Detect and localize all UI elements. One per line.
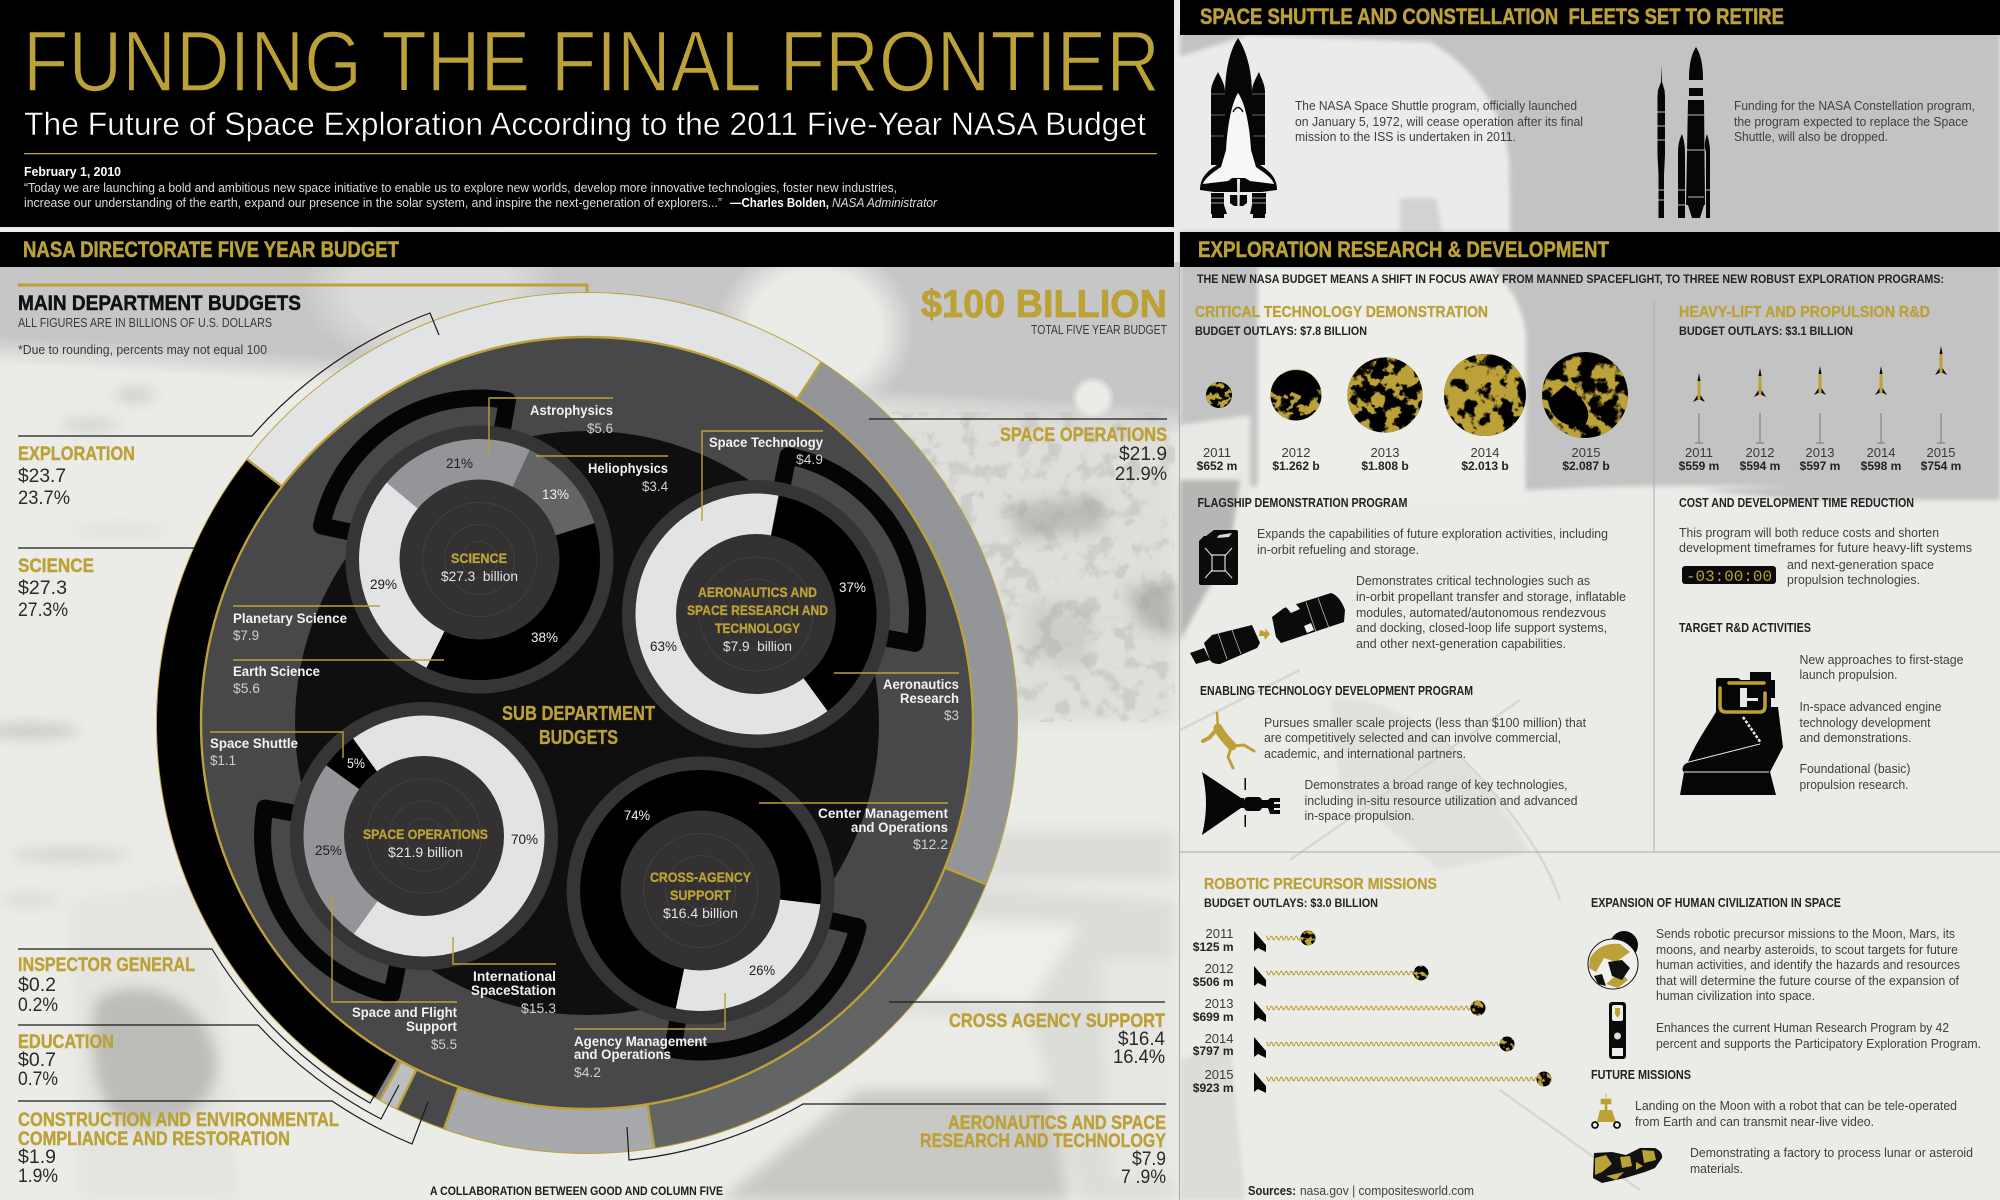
rocket chart by year: 2012 xyxy=(1746,445,1774,460)
sub donut: space operations: $21.9 billion xyxy=(388,845,463,860)
main label: construction: $1.9 xyxy=(18,1147,56,1168)
sub donut: aeronautics: 63% xyxy=(650,638,677,654)
panel: cost and development time: and next-generation space xyxy=(1787,557,1934,572)
main department budgets heading: ALL FIGURES ARE IN BILLIONS OF U.S. DOLLARS xyxy=(18,315,272,330)
quote xyxy=(24,180,938,210)
panel: expansion of human civilization: materials. xyxy=(1690,1161,1743,1176)
signal chart by year: 2013 xyxy=(1205,996,1234,1011)
sub donut: aeronautics: AERONAUTICS AND xyxy=(698,585,817,600)
section bar: shuttle fleets xyxy=(1180,0,2000,35)
panel: heavy-lift and propulsion: BUDGET OUTLAYS: $3.1 BILLION xyxy=(1679,324,1853,338)
sub-department leaders and labels: Planetary Science xyxy=(233,611,347,626)
main label: aeronautics and space research xyxy=(627,1104,1166,1188)
main label: construction: COMPLIANCE AND RESTORATION xyxy=(18,1129,290,1150)
sub donut: space operations: SPACE OPERATIONS xyxy=(363,827,488,842)
main label: space operations: $21.9 xyxy=(1119,444,1167,465)
text: constellation: Funding for the NASA Constellation program, xyxy=(1734,98,1975,113)
panel: flagship demonstration: modules, automated/autonomous rendezvous xyxy=(1356,605,1606,620)
main label: science: $27.3 xyxy=(18,578,67,599)
panel: target activities: launch propulsion. xyxy=(1800,667,1898,682)
sub donut: space operations xyxy=(263,696,564,994)
main label: science: 27.3% xyxy=(18,600,68,621)
sub-department leaders and labels: International xyxy=(473,969,556,984)
panel: expansion of human civilization: moons, and nearby asteroids, to scout targets for future xyxy=(1656,942,1958,957)
sub-department leaders and labels: $5.5 xyxy=(431,1037,457,1052)
sub-department leaders and labels: Earth Science xyxy=(233,664,320,679)
panel: target activities: and demonstrations. xyxy=(1800,730,1912,745)
panel: target activities xyxy=(1679,621,1964,795)
subtitle: The Future of Space Exploration According to the 2011 Five-Year NASA Budget xyxy=(24,106,1146,142)
panel: expansion of human civilization: Landing on the Moon with a robot that can be tele-operated xyxy=(1635,1098,1957,1113)
dark central disc xyxy=(295,431,879,1015)
main label: space operations: SPACE OPERATIONS xyxy=(1000,425,1167,446)
panel: target activities: TARGET R&D ACTIVITIES xyxy=(1679,621,1811,635)
sub donut: science: SCIENCE xyxy=(451,551,507,566)
main department budgets heading: *Due to rounding, percents may not equal 100 xyxy=(18,342,267,357)
rocket chart by year xyxy=(1679,346,1961,473)
moon chart by year: 2013 xyxy=(1371,445,1399,460)
icon: rover xyxy=(1592,1093,1620,1128)
panel: critical technology demonstration xyxy=(1195,304,1628,473)
panel: enabling technology: including in-situ resource utilization and advanced xyxy=(1304,793,1578,808)
main label: cross agency support xyxy=(889,1002,1165,1068)
main label: education: EDUCATION xyxy=(18,1032,114,1053)
main label: space operations xyxy=(869,419,1167,485)
sub donut: cross-agency: $16.4 billion xyxy=(663,906,738,921)
section bar: directorate budget: NASA DIRECTORATE FIVE YEAR BUDGET xyxy=(23,237,399,262)
sub donut: cross-agency: 74% xyxy=(624,807,650,823)
panel: cost and development time: propulsion technologies. xyxy=(1787,572,1920,587)
signal chart by year xyxy=(1193,926,1552,1095)
sub donut: science: 13% xyxy=(542,486,569,502)
sub donut: aeronautics: 37% xyxy=(839,579,866,595)
rocket chart by year: $597 m xyxy=(1800,459,1840,473)
panel: target activities: New approaches to first-stage xyxy=(1800,652,1964,667)
moon chart by year: $2.013 b xyxy=(1461,459,1509,473)
panel: expansion of human civilization: Enhances the current Human Research Program by 42 xyxy=(1656,1020,1949,1035)
sub-department leaders and labels: $5.6 xyxy=(587,421,613,436)
top leader connecting heading to chart xyxy=(18,285,587,293)
main label: construction xyxy=(18,1101,428,1187)
panel: critical technology demonstration: CRITICAL TECHNOLOGY DEMONSTRATION xyxy=(1195,304,1488,321)
title: FUNDING THE FINAL FRONTIER xyxy=(23,14,1160,110)
sub-department leaders and labels: Research xyxy=(900,691,959,706)
panel: enabling technology: are competitively selected and can involve commercial, xyxy=(1264,730,1561,745)
icon: earth and moon xyxy=(1588,931,1638,989)
text: shuttle: The NASA Space Shuttle program, officially launched xyxy=(1295,98,1577,113)
sub donut: aeronautics: $7.9 billion xyxy=(723,639,792,654)
sub donut: aeronautics xyxy=(616,456,918,754)
signal chart by year: 2015 xyxy=(1205,1067,1234,1082)
main label: aeronautics and space research: $7.9 xyxy=(1132,1149,1166,1170)
sub-department leaders and labels xyxy=(210,398,959,1080)
icon: fuel can xyxy=(1199,530,1238,585)
panel: expansion of human civilization: from Earth and can transmit near-live video. xyxy=(1635,1114,1874,1129)
panel: expansion of human civilization xyxy=(1588,896,1981,1183)
text: constellation: the program expected to replace the Space xyxy=(1734,114,1968,129)
main label: aeronautics and space research: AERONAUTICS AND SPACE xyxy=(948,1113,1166,1134)
icon: engine nozzle xyxy=(1202,772,1280,835)
sub donut: cross-agency: CROSS-AGENCY xyxy=(650,870,751,885)
panel: cost and development time: COST AND DEVELOPMENT TIME REDUCTION xyxy=(1679,496,1914,510)
signal chart by year: $923 m xyxy=(1193,1081,1234,1095)
quote: NASA Administrator xyxy=(832,195,938,210)
credit line: A COLLABORATION BETWEEN GOOD AND COLUMN FIVE xyxy=(430,1184,723,1198)
moon chart by year xyxy=(1197,352,1628,473)
sub-department leaders and labels: Heliophysics xyxy=(588,461,668,476)
panel: flagship demonstration: Expands the capabilities of future exploration activities, including xyxy=(1257,526,1608,541)
rocket chart by year: 2015 xyxy=(1927,445,1955,460)
sub donut: science: 21% xyxy=(446,455,473,471)
sub-department leaders and labels: $15.3 xyxy=(521,1001,556,1016)
moon chart by year: $1.262 b xyxy=(1272,459,1320,473)
total budget callout: $100 BILLION xyxy=(921,283,1167,326)
rocket chart by year: 2014 xyxy=(1867,445,1895,460)
moon chart by year: 2015 xyxy=(1572,445,1600,460)
sub donut: cross-agency: SUPPORT xyxy=(670,888,732,903)
sub donut: space operations: 5% xyxy=(347,755,365,771)
main label: science xyxy=(18,548,195,621)
section bar: exploration R and D xyxy=(1180,232,2000,267)
sub donut: cross-agency: 26% xyxy=(749,962,775,978)
dividers xyxy=(1180,267,2000,1200)
panel: expansion of human civilization: percent and supports the Participatory Exploration Program. xyxy=(1656,1036,1981,1051)
sub donut: space operations: 70% xyxy=(511,831,538,847)
panel: cost and development time xyxy=(1679,496,1972,587)
rocket chart by year: 2011 xyxy=(1685,445,1713,460)
sub-department leaders and labels: $4.9 xyxy=(796,452,823,467)
panel: robotic precursor missions: BUDGET OUTLAYS: $3.0 BILLION xyxy=(1204,896,1378,910)
sub-department leaders and labels: Space and Flight xyxy=(352,1005,457,1020)
panel: enabling technology: in-space propulsion. xyxy=(1304,808,1414,823)
sub donut: cross-agency xyxy=(567,756,858,1052)
main label: exploration: EXPLORATION xyxy=(18,444,135,465)
panel: flagship demonstration: FLAGSHIP DEMONSTRATION PROGRAM xyxy=(1198,496,1408,510)
moon chart by year: $1.808 b xyxy=(1361,459,1409,473)
panel: target activities: propulsion research. xyxy=(1800,777,1908,792)
main label: exploration: $23.7 xyxy=(18,466,66,487)
main label: cross agency support: 16.4% xyxy=(1113,1047,1165,1068)
moon chart by year: 2014 xyxy=(1471,445,1499,460)
main label: inspector general xyxy=(18,949,385,1103)
sub-department leaders and labels: SpaceStation xyxy=(471,983,556,998)
panel: enabling technology xyxy=(1200,684,1586,835)
text: constellation: Shuttle, will also be dropped. xyxy=(1734,129,1888,144)
panel: flagship demonstration: in-orbit refueling and storage. xyxy=(1257,542,1419,557)
signal chart by year: $506 m xyxy=(1193,975,1234,989)
sources: Sources: xyxy=(1248,1184,1296,1198)
section bar: exploration R and D: EXPLORATION RESEARCH & DEVELOPMENT xyxy=(1198,237,1609,262)
sub donut: science xyxy=(322,398,620,700)
panel: flagship demonstration: and other next-generation capabilities. xyxy=(1356,636,1566,651)
header panel xyxy=(0,0,1174,227)
panel: enabling technology: ENABLING TECHNOLOGY DEVELOPMENT PROGRAM xyxy=(1200,684,1473,698)
icon: constellation rockets xyxy=(1657,47,1710,218)
main label: education: $0.7 xyxy=(18,1050,56,1071)
date: February 1, 2010 xyxy=(24,164,121,179)
moon chart by year: $652 m xyxy=(1197,459,1237,473)
panel: robotic precursor missions xyxy=(1193,876,1552,1095)
main label: exploration xyxy=(18,313,439,509)
sub-department leaders and labels: Space Shuttle xyxy=(210,736,298,751)
icon: launch hardware xyxy=(1680,672,1783,795)
sub donut: science: 38% xyxy=(531,629,558,645)
sub-department leaders and labels: Center Management xyxy=(818,806,949,821)
rocket chart by year: 2013 xyxy=(1806,445,1834,460)
text: shuttle xyxy=(1295,98,1583,144)
sub-department heading: BUDGETS xyxy=(539,727,618,749)
panel: robotic precursor missions: ROBOTIC PRECURSOR MISSIONS xyxy=(1204,876,1437,893)
text: shuttle: on January 5, 1972, will cease operation after its final xyxy=(1295,114,1583,129)
panel: enabling technology: Demonstrates a broad range of key technologies, xyxy=(1304,777,1568,792)
rocket chart by year: $594 m xyxy=(1740,459,1780,473)
quote: —Charles Bolden, xyxy=(730,195,829,210)
sub-department leaders and labels: Space Technology xyxy=(709,435,823,450)
main label: construction: CONSTRUCTION AND ENVIRONMENTAL xyxy=(18,1110,339,1131)
sub donut: space operations: 25% xyxy=(315,842,342,858)
sub-department heading xyxy=(502,703,655,749)
panel: heavy-lift and propulsion xyxy=(1679,304,1961,473)
sub donut: science: 29% xyxy=(370,576,397,592)
panel: enabling technology: academic, and international partners. xyxy=(1264,746,1466,761)
main label: inspector general: 0.2% xyxy=(18,995,58,1016)
total budget callout: TOTAL FIVE YEAR BUDGET xyxy=(1031,322,1167,337)
icon: astronaut xyxy=(1203,713,1254,768)
icon: countdown clock: -03:00:00 xyxy=(1686,568,1772,586)
panel: flagship demonstration: in-orbit propellant transfer and storage, inflatable xyxy=(1356,589,1626,604)
main label: inspector general: INSPECTOR GENERAL xyxy=(18,955,195,976)
main department budgets heading xyxy=(18,292,301,357)
main label: science: SCIENCE xyxy=(18,556,94,577)
panel: target activities: In-space advanced engine xyxy=(1800,699,1942,714)
sub-department leaders and labels: $12.2 xyxy=(913,837,948,852)
icon: docking spacecraft xyxy=(1190,593,1345,664)
main label: inspector general: $0.2 xyxy=(18,975,56,996)
main label: cross agency support: CROSS AGENCY SUPPORT xyxy=(949,1011,1165,1032)
sub-department leaders and labels: Support xyxy=(406,1019,457,1034)
icon: asteroid xyxy=(1593,1148,1662,1183)
sub-department leaders and labels: $3 xyxy=(944,708,959,723)
panel: expansion of human civilization: human civilization into space. xyxy=(1656,988,1815,1003)
donut chart: main department budgets xyxy=(156,292,1018,1154)
panel: expansion of human civilization: Demonstrating a factory to process lunar or asteroid xyxy=(1690,1145,1973,1160)
panel: flagship demonstration xyxy=(1190,496,1626,664)
sub-department leaders and labels: Agency Management xyxy=(574,1034,707,1049)
main label: space operations: 21.9% xyxy=(1115,464,1167,485)
main label: construction: 1.9% xyxy=(18,1166,58,1187)
panel: target activities: Foundational (basic) xyxy=(1800,761,1910,776)
panel: expansion of human civilization: FUTURE MISSIONS xyxy=(1591,1068,1691,1082)
panel: heavy-lift and propulsion: HEAVY-LIFT AND PROPULSION R&D xyxy=(1679,304,1930,321)
signal chart by year: $125 m xyxy=(1193,940,1234,954)
sources: nasa.gov | compositesworld.com xyxy=(1300,1183,1474,1198)
panel: target activities: technology development xyxy=(1800,715,1931,730)
sub-department leaders and labels: and Operations xyxy=(851,820,948,835)
rocket chart by year: $598 m xyxy=(1861,459,1901,473)
moon chart by year: 2011 xyxy=(1203,445,1231,460)
signal chart by year: $699 m xyxy=(1193,1010,1234,1024)
section bar: shuttle fleets: SPACE SHUTTLE AND CONSTELLATION FLEETS SET TO RETIRE xyxy=(1200,4,1784,29)
panel: flagship demonstration: and docking, closed-loop life support systems, xyxy=(1356,620,1607,635)
sub-department leaders and labels: $3.4 xyxy=(642,479,668,494)
main label: cross agency support: $16.4 xyxy=(1118,1029,1165,1050)
main label: aeronautics and space research: RESEARCH AND TECHNOLOGY xyxy=(920,1131,1166,1152)
text: constellation xyxy=(1734,98,1975,144)
panel: cost and development time: development timeframes for future heavy-lift systems xyxy=(1679,540,1972,555)
sub-department leaders and labels: Astrophysics xyxy=(530,403,613,418)
panel: expansion of human civilization: human activities, and identify the hazards and resources xyxy=(1656,957,1960,972)
signal chart by year: 2014 xyxy=(1205,1031,1234,1046)
panel: expansion of human civilization: Sends robotic precursor missions to the Moon, Mars, its xyxy=(1656,926,1955,941)
text: shuttle: mission to the ISS is undertaken in 2011. xyxy=(1295,129,1516,144)
section bar: directorate budget xyxy=(0,232,1174,267)
rocket chart by year: $754 m xyxy=(1921,459,1961,473)
panel: expansion of human civilization: EXPANSION OF HUMAN CIVILIZATION IN SPACE xyxy=(1591,896,1841,910)
signal chart by year: 2012 xyxy=(1205,961,1234,976)
panel: critical technology demonstration: BUDGET OUTLAYS: $7.8 BILLION xyxy=(1195,324,1367,338)
sub-department leaders and labels: $5.6 xyxy=(233,681,260,696)
icon: space shuttle xyxy=(1200,38,1277,218)
panel: cost and development time: This program will both reduce costs and shorten xyxy=(1679,525,1939,540)
sub-department heading: SUB DEPARTMENT xyxy=(502,703,655,725)
panel: expansion of human civilization: that will determine the future course of the expansion of xyxy=(1656,973,1959,988)
main label: education xyxy=(18,1025,399,1119)
panel: flagship demonstration: Demonstrates critical technologies such as xyxy=(1356,573,1590,588)
sub-department leaders and labels: $1.1 xyxy=(210,753,236,768)
sub donut: science: $27.3 billion xyxy=(441,569,518,584)
panel: enabling technology: Pursues smaller scale projects (less than $100 million) that xyxy=(1264,715,1586,730)
main label: education: 0.7% xyxy=(18,1069,58,1090)
moon chart by year: $2.087 b xyxy=(1562,459,1610,473)
signal chart by year: $797 m xyxy=(1193,1044,1234,1058)
moon chart by year: 2012 xyxy=(1282,445,1310,460)
quote: increase our understanding of the earth, expand our presence in the solar system, and inspire the next-generation of explorers...” xyxy=(24,195,722,210)
sub-department leaders and labels: and Operations xyxy=(574,1047,671,1062)
sub donut: aeronautics: SPACE RESEARCH AND xyxy=(687,603,828,618)
icon: capsule xyxy=(1609,1002,1626,1059)
main label: exploration: 23.7% xyxy=(18,488,70,509)
sub-department leaders and labels: $4.2 xyxy=(574,1065,601,1080)
signal chart by year: 2011 xyxy=(1206,926,1234,941)
sub-department leaders and labels: $7.9 xyxy=(233,628,259,643)
sub donut: aeronautics: TECHNOLOGY xyxy=(715,621,800,636)
top grey sky band of left panel xyxy=(0,210,1180,432)
main department budgets heading: MAIN DEPARTMENT BUDGETS xyxy=(18,292,301,315)
quote: “Today we are launching a bold and ambitious new space initiative to enable us to explore new worlds, develop more innovative technologies, foster new industries, xyxy=(24,180,897,195)
rocket chart by year: $559 m xyxy=(1679,459,1719,473)
sub-department leaders and labels: Aeronautics xyxy=(883,677,959,692)
main label: aeronautics and space research: 7 .9% xyxy=(1121,1167,1166,1188)
